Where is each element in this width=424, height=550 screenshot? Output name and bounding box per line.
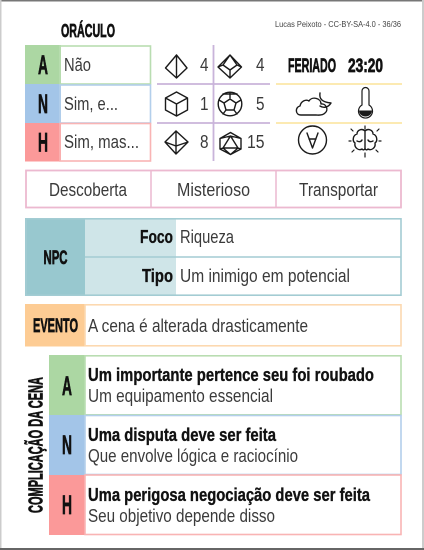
title: oráculo: ORÁCULO: [61, 20, 115, 41]
panel: scene complications: Uma disputa deve ser feita: [88, 425, 277, 445]
panel: oracle table: H: [38, 128, 48, 158]
panel: evento: EVENTO: [33, 316, 78, 337]
panel: evento: A cena é alterada drasticamente: [88, 316, 308, 336]
panel: scene complications: A: [62, 371, 72, 401]
panel: npc: Riqueza: [180, 227, 235, 247]
icon: thermometer: [359, 88, 372, 118]
panel: oracle table: Sim, mas...: [64, 132, 139, 152]
icon: d12: [218, 92, 242, 116]
panel: dice grid: 15: [247, 132, 264, 152]
heading: feriado: FERIADO: [288, 56, 336, 77]
heading: complicação da cena: COMPLICAÇÃO DA CENA: [24, 377, 48, 513]
icon: circled inverted A: [298, 126, 326, 154]
icon: cloud and moon: [296, 93, 331, 115]
panel: npc: NPC: [44, 248, 68, 269]
panel: scene complications: Seu objetivo depende disso: [88, 506, 275, 526]
panel: oracle table: Sim, e...: [64, 94, 118, 114]
panel: dice grid: 4: [256, 55, 264, 75]
panel: npc: Tipo: [142, 266, 173, 286]
panel: scene complications: H: [62, 490, 72, 520]
panel: dice grid: 4: [200, 55, 208, 75]
panel: evento: [25, 304, 401, 346]
panel: dice grid: 1: [200, 94, 208, 114]
heading: time: 23:20: [348, 56, 383, 77]
icon: d20: [220, 132, 241, 154]
icon: brain: [349, 126, 381, 157]
icon: d8: [165, 131, 188, 154]
panel: oracle table: [25, 45, 150, 162]
panel: oracle table: Não: [64, 55, 91, 75]
panel: scene complications: Uma perigosa negociação deve ser feita: [88, 485, 371, 505]
panel: scene complications: Que envolve lógica e raciocínio: [88, 446, 298, 466]
panel: dice grid: [157, 45, 270, 161]
panel: scene complications: N: [62, 430, 72, 460]
panel: scene status: [276, 56, 402, 157]
panel: meaning words: Misterioso: [177, 180, 250, 200]
panel: dice grid: 5: [256, 94, 264, 114]
panel: dice grid: 8: [200, 132, 208, 152]
panel: oracle table: A: [38, 50, 48, 80]
credit line: Lucas Peixoto - CC-BY-SA-4.0 - 36/36: [275, 20, 402, 29]
panel: meaning words: Descoberta: [49, 180, 128, 200]
panel: npc: Um inimigo em potencial: [180, 266, 350, 286]
panel: oracle table: N: [38, 89, 48, 119]
panel: meaning words: [26, 170, 401, 208]
panel: npc: [25, 218, 401, 296]
panel: meaning words: Transportar: [299, 180, 378, 200]
icon: d6: [166, 92, 188, 116]
panel: scene complications: [49, 355, 401, 535]
panel: scene complications: Um equipamento essencial: [88, 386, 273, 406]
panel: npc: Foco: [140, 227, 173, 247]
icon: d10: [218, 55, 242, 78]
icon: d4: [166, 55, 187, 78]
